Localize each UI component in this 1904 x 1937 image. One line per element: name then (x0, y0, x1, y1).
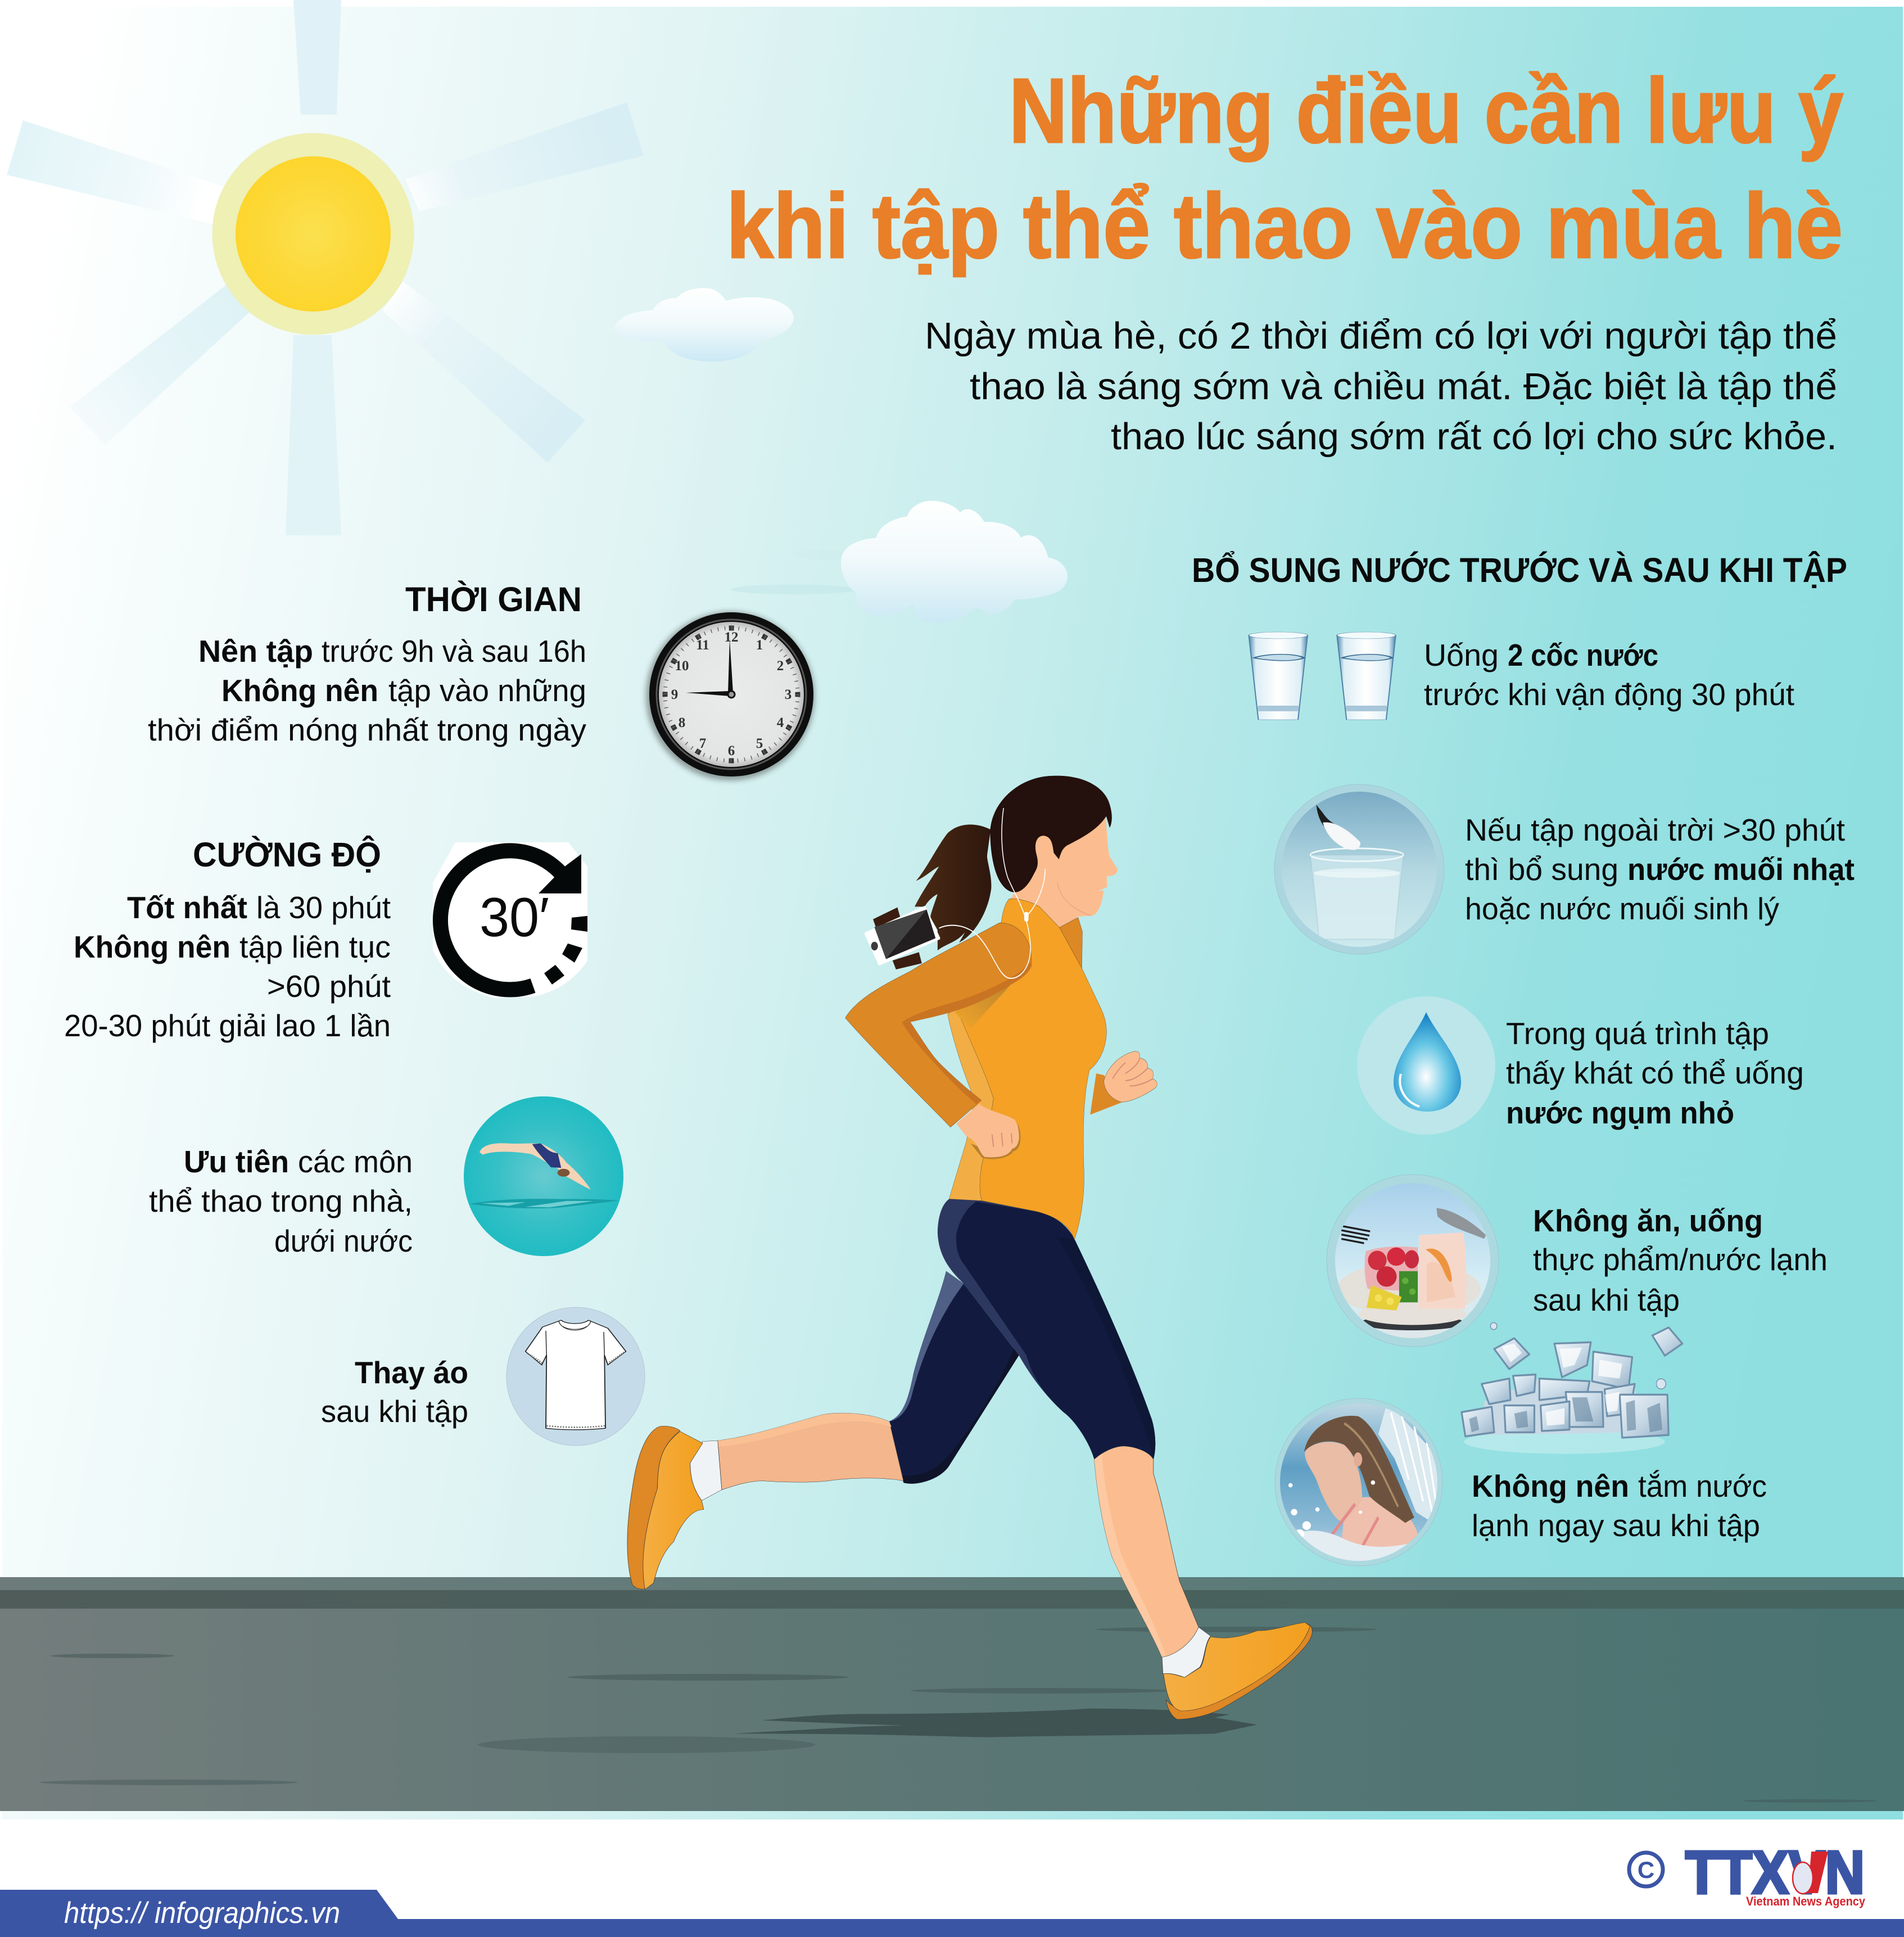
text: no cold food: sau khi tập (1533, 1283, 1680, 1317)
front leg and shoe (1094, 1446, 1312, 1719)
text: two glasses: 2 cốc nước (1508, 638, 1658, 672)
icon: wall clock: 8 (679, 715, 685, 730)
text: no cold food: thực phẩm/nước lạnh (1533, 1242, 1828, 1277)
heading: water: BỔ SUNG NƯỚC TRƯỚC VÀ SAU KHI TẬP (1192, 550, 1847, 589)
text: two glasses (1424, 638, 1794, 712)
section: cường độ (64, 836, 391, 1043)
sun (212, 133, 414, 335)
text: salt water: Nếu tập ngoài trời >30 phút (1465, 812, 1845, 847)
icon: wall clock: 9 (671, 687, 678, 702)
text: indoor sports: Ưu tiên (184, 1144, 289, 1179)
text: no cold shower: lạnh ngay sau khi tập (1472, 1508, 1760, 1543)
cloud small (614, 288, 794, 362)
text: no cold shower: Không nên (1472, 1469, 1629, 1503)
icon: 30 minute timer (433, 842, 587, 998)
icon: water drop circle (1357, 996, 1495, 1135)
icon: two glasses of water (1249, 632, 1396, 720)
icon: wall clock: 4 (777, 715, 784, 730)
road ground (0, 1577, 1904, 1811)
torso and arms (845, 776, 1157, 1239)
sun rays (7, 0, 644, 535)
text: small sips (1506, 1016, 1804, 1130)
section: cường độ: CƯỜNG ĐỘ (193, 836, 381, 874)
section: cường độ: tập liên tục (239, 929, 391, 964)
footer white area and strip (0, 1819, 1904, 1937)
cloud large (731, 501, 1068, 623)
title: khi tập thể thao vào mùa hè (726, 174, 1843, 277)
icon: wall clock: 2 (777, 658, 784, 674)
text: no cold shower: tắm nước (1638, 1469, 1767, 1503)
icon: frozen food circle (1327, 1175, 1499, 1347)
image: ice cubes (1462, 1322, 1683, 1454)
icon: wall clock: 1 (756, 638, 763, 653)
text: salt water: hoặc nước muối sinh lý (1465, 891, 1779, 926)
section: thời gian: tập vào những (388, 673, 586, 708)
text: small sips: Trong quá trình tập (1506, 1016, 1769, 1051)
section: cường độ: 20-30 phút giải lao 1 lần (64, 1008, 391, 1043)
icon: wall clock (646, 612, 815, 780)
logo: TTXVN: TTXVN (1685, 1838, 1865, 1906)
leggings (938, 1199, 1155, 1459)
section: cường độ: Tốt nhất (127, 890, 247, 925)
section: thời gian: thời điểm nóng nhất trong ngày (148, 712, 587, 747)
logo: TTXVN: Vietnam News Agency (1746, 1894, 1866, 1908)
icon: wall clock: 3 (785, 687, 792, 702)
runner figure (627, 776, 1312, 1719)
icon: wall clock: 11 (696, 638, 709, 653)
text: salt water: thì bổ sung (1465, 852, 1618, 887)
text: small sips: nước ngụm nhỏ (1506, 1095, 1734, 1130)
title (726, 59, 1843, 277)
text: indoor sports: dưới nước (274, 1223, 413, 1258)
text: indoor sports: các môn (298, 1144, 413, 1179)
text: change shirt: Thay áo (355, 1355, 468, 1390)
footer url: https:// infographics.vn (64, 1897, 340, 1930)
icon: t-shirt circle (506, 1307, 645, 1446)
text: small sips: thấy khát có thể uống (1506, 1055, 1804, 1090)
intro paragraph: thao là sáng sớm và chiều mát. Đặc biệt là tập thể (970, 365, 1837, 408)
icon: wall clock: 7 (699, 736, 706, 751)
text: no cold food: Không ăn, uống (1533, 1203, 1763, 1238)
rear leg and shoe (627, 1271, 1019, 1590)
text: indoor sports (149, 1144, 413, 1258)
intro paragraph (925, 315, 1837, 458)
section: cường độ: >60 phút (267, 969, 391, 1004)
intro paragraph: Ngày mùa hè, có 2 thời điểm có lợi với người tập thể (925, 315, 1837, 357)
text: indoor sports: thể thao trong nhà, (149, 1184, 413, 1218)
section: thời gian: Không nên (221, 673, 378, 708)
text: no cold food (1533, 1203, 1828, 1317)
section: thời gian: Nên tập (198, 634, 313, 669)
icon: wall clock: 6 (728, 743, 735, 758)
section: cường độ: Không nên (74, 929, 230, 964)
section: thời gian: trước 9h và sau 16h (322, 634, 586, 669)
icon: salt water circle (1274, 784, 1445, 956)
text: no cold shower (1472, 1469, 1767, 1543)
icon: wall clock: 12 (724, 630, 739, 645)
ponytail (915, 825, 991, 950)
logo: TTXVN (1629, 1838, 1866, 1908)
section: cường độ: là 30 phút (256, 890, 391, 925)
text: two glasses: trước khi vận động 30 phút (1424, 677, 1794, 712)
section: thời gian (148, 580, 587, 747)
icon: woman bathing circle (1275, 1398, 1445, 1577)
icon: wall clock: 10 (675, 658, 689, 674)
icon: swimmer circle (464, 1096, 623, 1256)
intro paragraph: thao lúc sáng sớm rất có lợi cho sức khỏe. (1111, 416, 1837, 458)
text: change shirt (321, 1355, 468, 1429)
icon: 30 minute timer: 30′ (480, 886, 549, 948)
icon: wall clock: 5 (756, 736, 763, 751)
text: salt water (1465, 812, 1855, 926)
text: salt water: nước muối nhạt (1627, 852, 1855, 887)
text: change shirt: sau khi tập (321, 1394, 468, 1429)
text: two glasses: Uống (1424, 638, 1499, 672)
logo: TTXVN: C (1638, 1857, 1654, 1883)
section: thời gian: THỜI GIAN (405, 580, 582, 618)
